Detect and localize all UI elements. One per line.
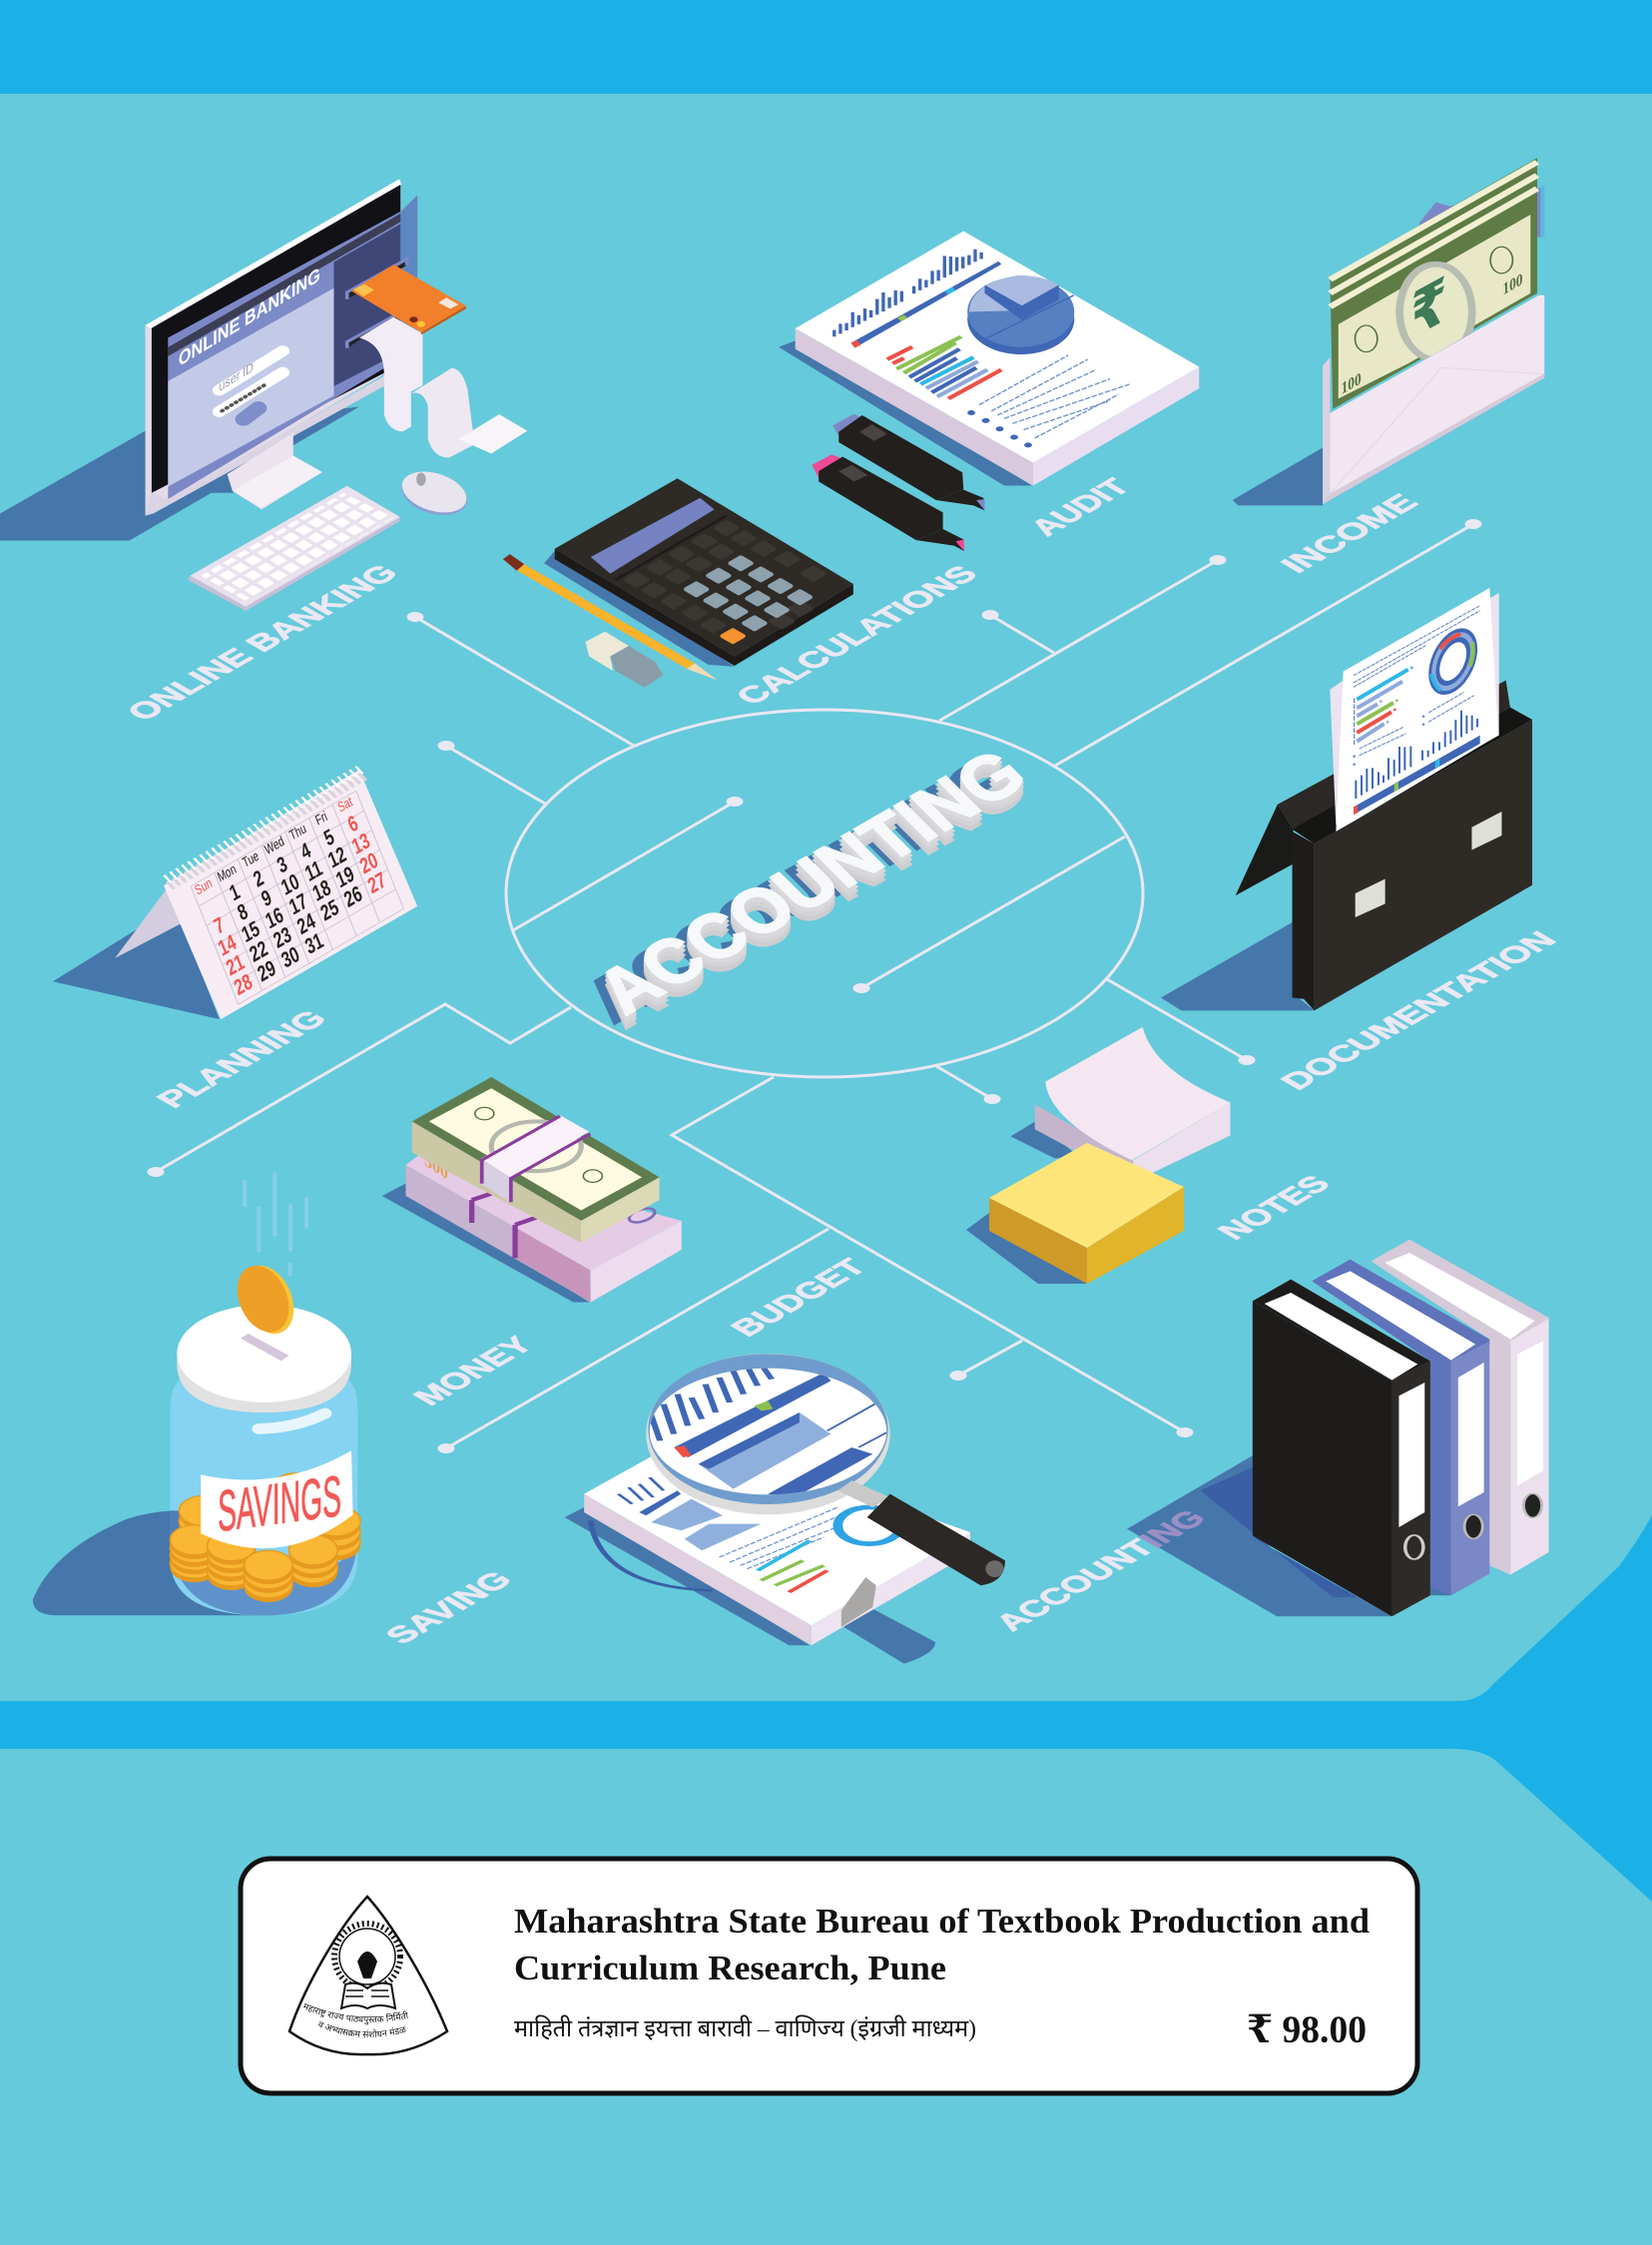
illustration: savings jar (33, 1173, 360, 1615)
publisher name line 2: Curriculum Research, Pune (514, 1949, 946, 1987)
income envelope: ₹ (1410, 263, 1446, 352)
calendar: Tue (241, 847, 262, 870)
central 3D title: ACCOUNTING (580, 737, 1042, 1027)
calendar: 1 (227, 879, 244, 906)
calendar: Fri (313, 808, 329, 829)
calendar: 20 (357, 848, 381, 879)
magnified report (565, 1434, 970, 1664)
savings label: SAVINGS (218, 1463, 341, 1544)
illustration: document briefcase and notes (1011, 588, 1532, 1182)
jar (170, 1370, 357, 1615)
label: planning: PLANNING (149, 1005, 334, 1113)
central 3D title: ACCOUNTING (580, 745, 1042, 1035)
calendar: Wed (263, 833, 286, 858)
monitor shadow (0, 407, 359, 540)
price: ₹ 98.00 (1247, 2008, 1367, 2051)
calendar: 13 (349, 829, 373, 859)
black binder (1253, 1280, 1430, 1616)
calendar: 3 (275, 852, 290, 879)
falling coin (229, 1262, 302, 1339)
label: money: MONEY (405, 1332, 541, 1410)
report sheet (1330, 588, 1499, 832)
label: saving: SAVING (377, 1566, 520, 1649)
calendar: 17 (286, 889, 310, 920)
calendar: 30 (278, 942, 303, 973)
illustration: magnifier and binders (565, 1240, 1549, 1664)
calendar: 21 (224, 950, 248, 981)
monitor: user ID (220, 358, 254, 394)
label: accounting: ACCOUNTING (987, 1504, 1214, 1636)
publisher logo (287, 1895, 449, 2056)
calendar: 5 (321, 826, 338, 851)
calendar: 24 (294, 909, 319, 940)
calendar: 12 (325, 842, 349, 873)
receipt slots (347, 260, 407, 348)
calendar: 9 (259, 885, 275, 912)
monitor (146, 180, 417, 516)
central 3D title: ACCOUNTING (568, 746, 1030, 1036)
calendar: 14 (216, 930, 240, 961)
label: audit: AUDIT (1022, 473, 1138, 541)
calendar: 19 (333, 862, 357, 893)
briefcase (1161, 588, 1532, 1010)
jar lid (177, 1305, 351, 1412)
top band (0, 0, 1652, 94)
label: budget: BUDGET (723, 1254, 874, 1342)
monitor stand (228, 433, 322, 509)
central 3D title: ACCOUNTING (580, 750, 1042, 1040)
savings label (201, 1450, 353, 1548)
paper receipt (359, 317, 527, 458)
marker: purple (832, 414, 984, 510)
pencil (503, 554, 718, 681)
calendar: 25 (317, 895, 342, 926)
magnifier handle (867, 1494, 1005, 1585)
calendar: 8 (235, 899, 252, 926)
publisher box (238, 1857, 1419, 2096)
income envelope: 100 (1342, 369, 1362, 398)
book title in Marathi: माहिती तंत्रज्ञान इयत्ता बारावी – वाणिज्य (इंग्रजी माध्यम) (514, 2014, 976, 2042)
publisher logo: महाराष्ट्र राज्य पाठ्यपुस्तक निर्मिती (303, 2002, 408, 2024)
calendar: 28 (232, 970, 257, 1001)
calendar: 31 (302, 928, 327, 960)
magnifier lens (646, 1354, 890, 1514)
label: online banking: ONLINE BANKING (119, 559, 405, 726)
calendar: 10 (278, 869, 302, 900)
illustration: audit report, markers, income envelope (779, 158, 1544, 551)
lilac binder (1372, 1240, 1549, 1575)
coins (170, 1473, 360, 1602)
calendar: 15 (239, 917, 264, 948)
label: calculations: CALCULATIONS (728, 560, 985, 710)
label: documentation: DOCUMENTATION (1273, 926, 1564, 1095)
calendar: Sun (193, 874, 215, 898)
calendar: 11 (302, 856, 326, 887)
calendar: 29 (255, 956, 279, 987)
bank card (351, 265, 466, 334)
income envelope (1233, 158, 1544, 505)
calendar: 16 (263, 903, 287, 934)
calendar: Thu (287, 821, 308, 843)
connector diagram (148, 519, 1481, 1453)
keyboard (188, 486, 400, 611)
sticky note pad: yellow (966, 1143, 1184, 1284)
calendar: 26 (341, 882, 365, 913)
binders shadow (1127, 1455, 1451, 1616)
calendar: 18 (309, 875, 334, 907)
income envelope: 100 (1502, 271, 1522, 299)
calendar (53, 769, 417, 1019)
audit report (779, 232, 1199, 485)
illustration: calendar and money (53, 769, 682, 1303)
mouse (392, 463, 477, 524)
calendar: 2 (251, 866, 268, 892)
calendar: 23 (271, 923, 295, 954)
calendar: 27 (365, 868, 389, 899)
calendar: 6 (345, 812, 361, 838)
illustration: computer, keyboard, calculator (0, 180, 853, 688)
calendar: 22 (247, 936, 272, 967)
sticky note pad: lilac (1011, 1027, 1230, 1182)
band and corner between panels (0, 1515, 1652, 1902)
speed lines (245, 1173, 306, 1276)
dollar note bundle (412, 1077, 660, 1243)
label: income: INCOME (1273, 489, 1425, 578)
publisher logo: व अभ्यासक्रम संशोधन मंडळ (318, 2020, 405, 2038)
central 3D title: ACCOUNTING (580, 741, 1042, 1031)
marker: pink (812, 454, 964, 551)
jar shadow (33, 1510, 275, 1615)
calendar: 4 (297, 839, 314, 865)
eraser (585, 632, 663, 688)
calendar: 7 (212, 913, 228, 939)
euro note bundle: 500 (424, 1150, 448, 1184)
label: notes: NOTES (1210, 1170, 1338, 1245)
publisher name: Maharashtra State Bureau of Textbook Production and (514, 1902, 1371, 1941)
euro note bundle (382, 1150, 682, 1303)
calendar: Mon (216, 860, 239, 885)
calculator (544, 478, 853, 667)
blue binder (1312, 1260, 1489, 1595)
monitor: ONLINE BANKING (179, 263, 320, 371)
calendar: Sat (335, 793, 355, 816)
